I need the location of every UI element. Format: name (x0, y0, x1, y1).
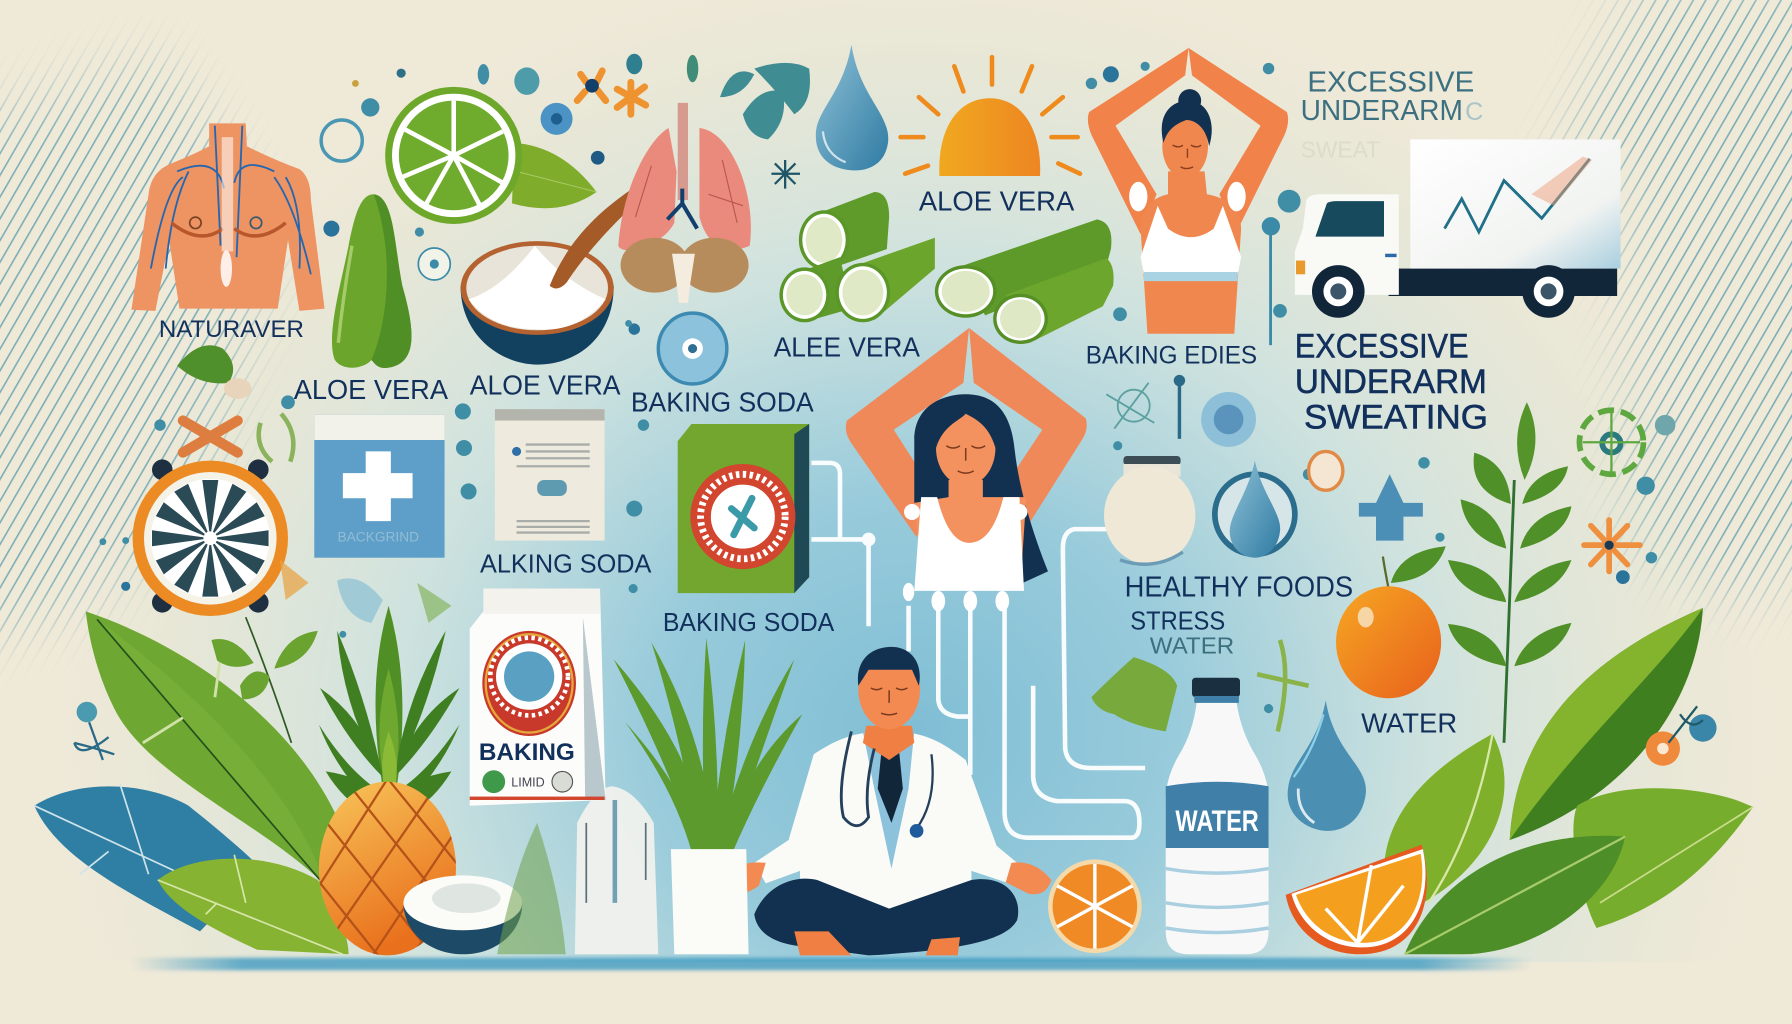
text: faint excessive underarm: EXCESSIVE (1307, 66, 1474, 98)
icon: stem with small leaves (211, 617, 318, 743)
icon: blue cell (541, 103, 573, 135)
icon: green sprigs (1091, 640, 1309, 731)
panel: paper document (495, 409, 605, 541)
icon: orange fruit (1336, 546, 1446, 698)
icon: aloe cylinders right group (935, 219, 1114, 344)
icon: blue leaf (34, 784, 261, 931)
icon: water bottle (1166, 678, 1269, 954)
icon: human torso (131, 123, 325, 311)
icon: green gear (1579, 410, 1643, 474)
icon: baking soda bag: BAKING (479, 739, 575, 766)
connector tubes white (811, 463, 1145, 838)
icon: line glyph (1106, 383, 1154, 429)
icon: orange wedge (1286, 845, 1427, 954)
icon: pineapple (318, 606, 460, 956)
icon: pin (1262, 217, 1280, 345)
text: baking soda 1: BAKING SODA (631, 386, 814, 417)
icon: faint green plant (497, 823, 566, 954)
icon: green sprig (259, 414, 293, 462)
icon: baking soda bag: LIMID (511, 775, 545, 789)
icon: orange flower (1584, 520, 1640, 571)
title: excessive underarm sweating: EXCESSIVE (1295, 328, 1469, 366)
icon: stick pin right (1174, 375, 1185, 439)
text: water: WATER (1361, 708, 1457, 739)
icon: blue disc (1201, 392, 1256, 447)
text: aloe vera sun: ALOE VERA (919, 185, 1075, 216)
text: faint excessive underarm (1301, 66, 1483, 163)
scattered decorative dots (99, 54, 1675, 713)
icon: orange flowers (577, 71, 646, 114)
panel: green baking soda box (678, 424, 809, 593)
icon: big right leaves (1384, 608, 1753, 954)
text: aloe vera 2: ALOE VERA (470, 369, 621, 400)
icon: orange slice (1048, 859, 1142, 953)
icon: outlined circle (418, 248, 450, 280)
icon: sun (901, 57, 1080, 176)
icon: potted plant (614, 638, 802, 954)
illustration: central woman with raised arms (846, 328, 1087, 611)
icon: small green leaf (158, 855, 349, 954)
illustration: meditating doctor (720, 647, 1051, 955)
icon: water drop top (816, 45, 888, 170)
text: faint excessive underarm: C (1465, 98, 1483, 126)
icon: delivery truck with chart (1295, 139, 1621, 318)
icon: bowl of baking soda with spoon (461, 179, 654, 365)
icon: teal knot left (74, 702, 114, 760)
icon: small water motifs left (280, 560, 451, 623)
icon: snowflake glyph (771, 160, 800, 189)
icon: orange cross (183, 421, 238, 453)
icon: aloe leaf (332, 194, 412, 368)
panel: blue box with cross (314, 415, 445, 558)
icon: teal plant glyph (720, 63, 810, 139)
text: aloe vera 1: ALOE VERA (294, 374, 449, 405)
icon: water drop in circle (1215, 461, 1295, 558)
text: baking soda 2: BAKING SODA (663, 607, 835, 637)
panel: blue box with cross: BACKGRIND (338, 530, 419, 545)
icon: coconut half (403, 875, 522, 954)
text: faint excessive underarm: SWEAT (1301, 137, 1380, 163)
title: excessive underarm sweating: UNDERARM (1295, 363, 1487, 401)
text: alee vera: ALEE VERA (774, 332, 921, 363)
icon: ring (321, 120, 362, 161)
text: naturaver: NATURAVER (159, 316, 304, 343)
icon: lime slice with leaf (385, 87, 597, 224)
title: excessive underarm sweating (1295, 328, 1488, 437)
icon: water drop right (1288, 701, 1366, 831)
text: baking edies: BAKING EDIES (1086, 341, 1257, 369)
icon: orange sketch circle (1309, 451, 1343, 490)
icon: baking soda bag (470, 589, 606, 806)
text: healthy foods: HEALTHY FOODS (1125, 572, 1353, 604)
icon: leaf sprig left (177, 345, 251, 399)
icon: blue plus (1359, 474, 1423, 541)
text: faint excessive underarm: UNDERARM (1301, 95, 1463, 127)
icon: clock wheel (133, 459, 288, 616)
icon: ghost coat (575, 786, 658, 954)
icon: water bottle: WATER (1175, 805, 1259, 838)
icon: jar (1104, 456, 1195, 565)
icon: stem plant with leaf pairs (1448, 402, 1571, 743)
title: excessive underarm sweating: SWEATING (1304, 399, 1488, 437)
text: water faint: WATER (1150, 633, 1234, 659)
icon: lungs (618, 103, 751, 303)
text: stress: STRESS (1130, 606, 1225, 636)
illustration: woman top with raised arms (1088, 48, 1288, 334)
icon: aloe cylinders left group (779, 192, 935, 322)
icon: big left leaf (86, 611, 343, 903)
text: alking soda: ALKING SODA (480, 549, 652, 579)
icon: blue round badge (658, 313, 727, 384)
icon: orange and teal knot right (1646, 706, 1717, 766)
